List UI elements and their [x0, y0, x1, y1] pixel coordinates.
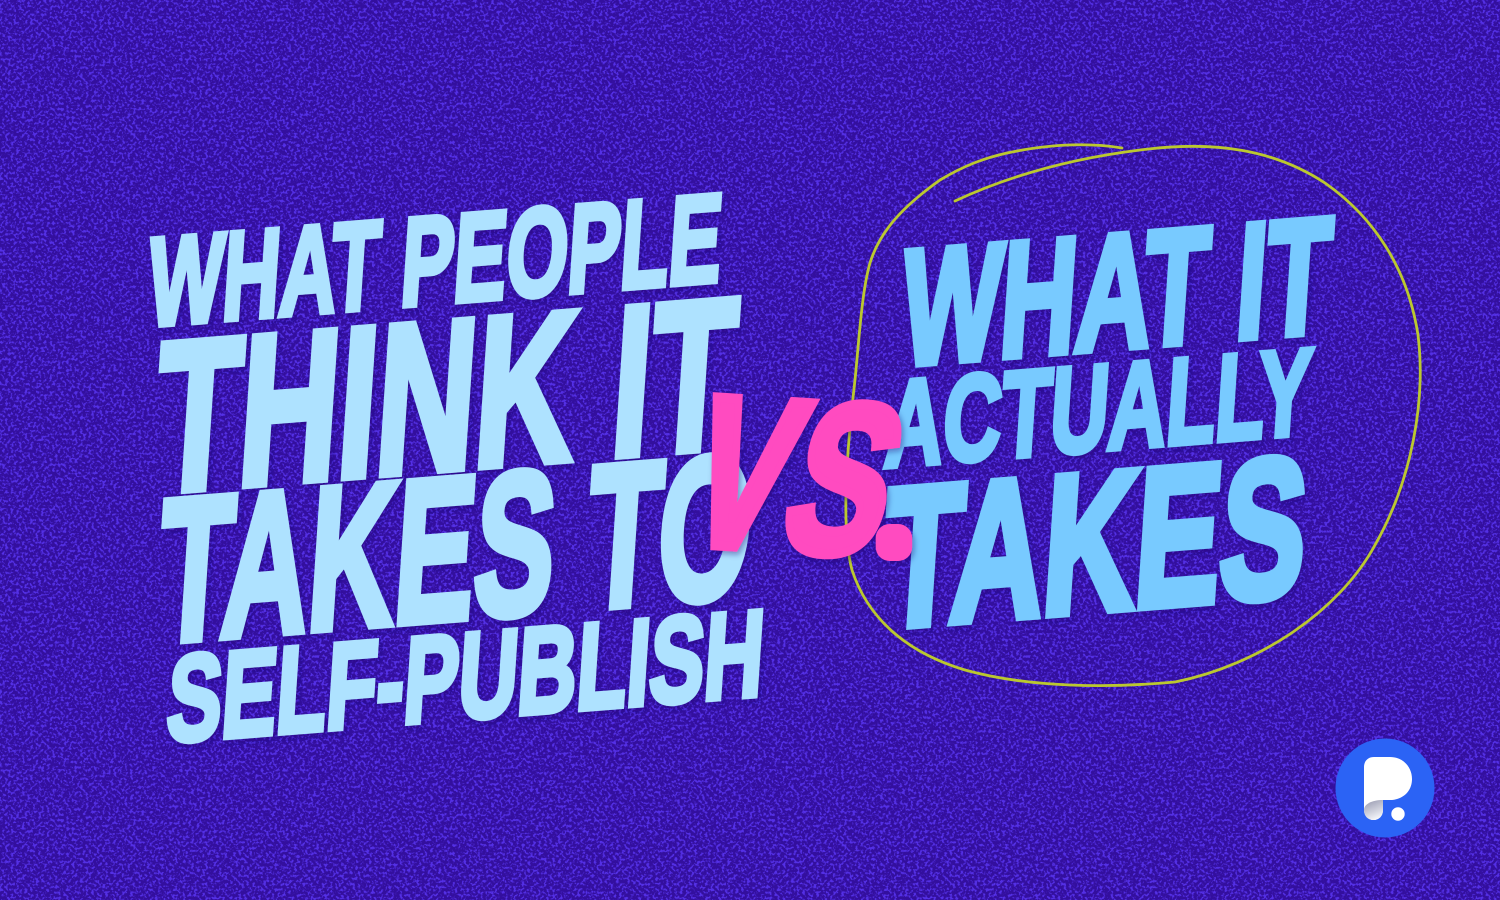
- VS. label: .: [886, 493, 902, 560]
- line: WHAT PEOPLE: WHAT PEOPLE: [144, 167, 727, 353]
- line: THINK IT: THINK IT: [149, 254, 743, 538]
- logo: blue circle with page P: [1336, 738, 1434, 838]
- left heading: what people think it takes to self-publish: [144, 167, 769, 768]
- VS. label: VS: [662, 352, 928, 601]
- line: TAKES TO: TAKES TO: [152, 412, 759, 686]
- hand-drawn circle around right heading: [846, 145, 1420, 686]
- line: SELF-PUBLISH: SELF-PUBLISH: [163, 584, 769, 768]
- right heading: what it actually takes: [877, 183, 1337, 669]
